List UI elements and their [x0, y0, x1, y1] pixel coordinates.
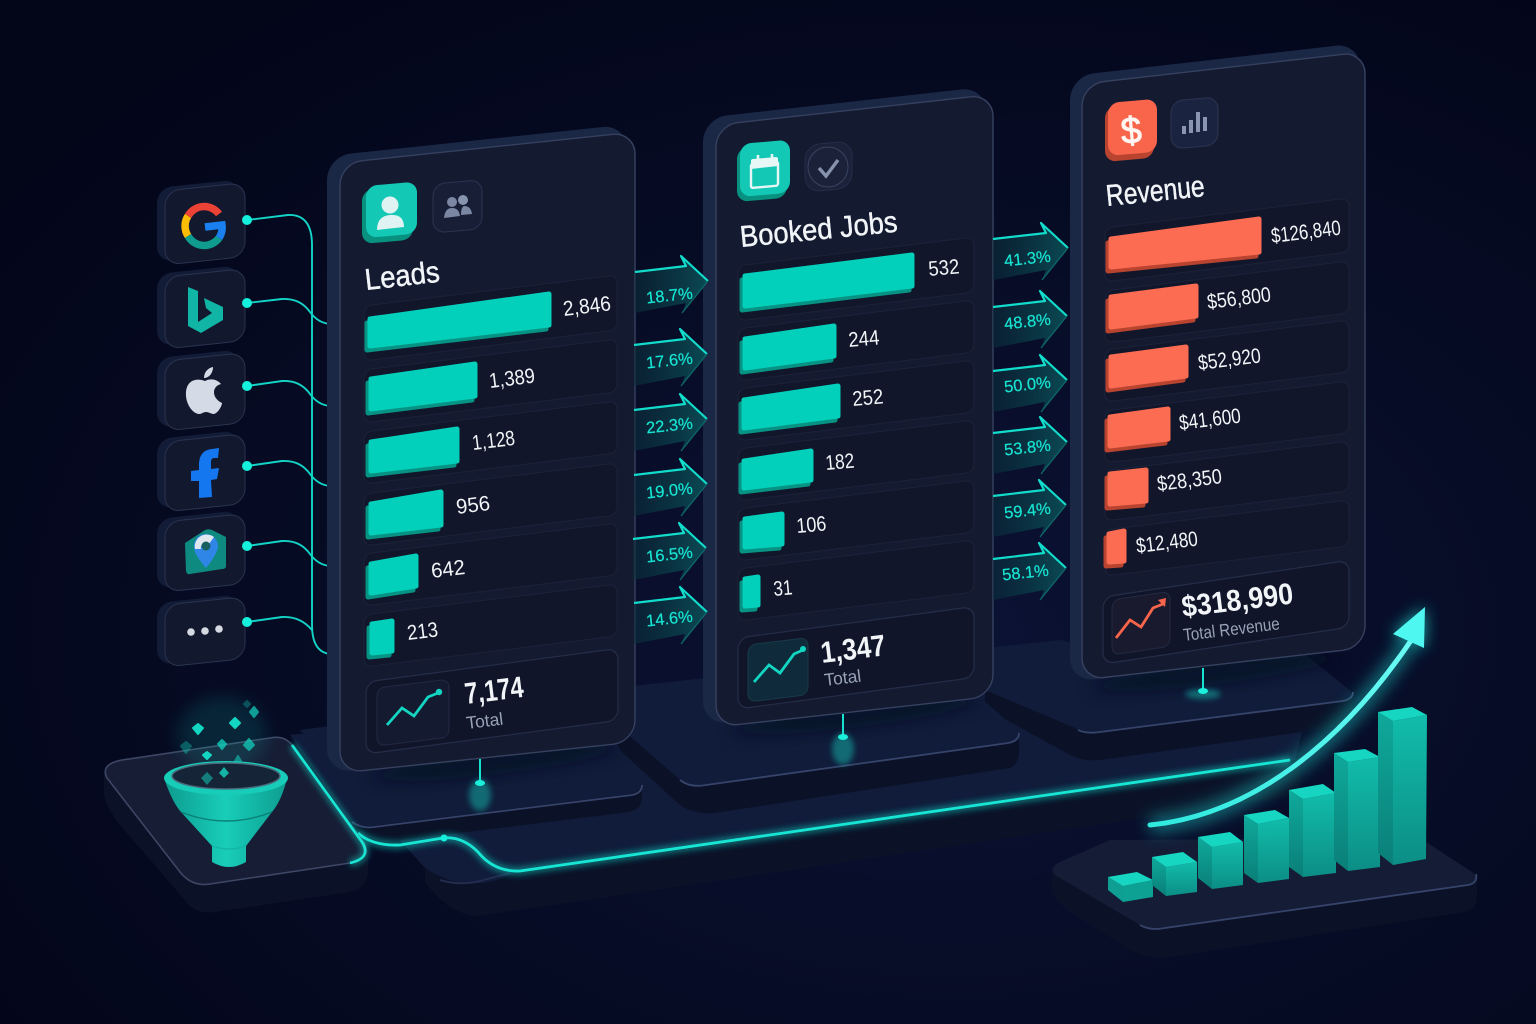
- conversion arrow 48.8%: 48.8%: [1003, 311, 1052, 333]
- panel: leads: [327, 124, 635, 773]
- funnel icon: [164, 697, 288, 867]
- conversion arrow 14.6%: [634, 587, 707, 644]
- source: maps: [157, 510, 252, 592]
- booked jobs rows: [738, 237, 974, 621]
- booked jobs bar 252: 252: [851, 385, 884, 411]
- leads bar 213: [369, 618, 439, 657]
- booked jobs total: 1,347: [819, 629, 887, 670]
- revenue bar $52,920: $52,920: [1197, 344, 1262, 375]
- revenue bar $41,600: [1107, 405, 1242, 450]
- leads bar 2,846: 2,846: [562, 292, 612, 321]
- booked jobs bar 244: [742, 326, 881, 372]
- conversion arrow 17.6%: [634, 329, 707, 386]
- revenue icon: dollar: [1105, 99, 1157, 162]
- revenue total: $318,990: [1180, 578, 1295, 624]
- booked jobs bar 106: 106: [795, 512, 827, 538]
- revenue bar $12,480: [1106, 528, 1199, 566]
- leads bar 1,128: 1,128: [471, 427, 516, 455]
- booked jobs icon: check: [805, 141, 852, 192]
- booked jobs bar 532: [742, 255, 960, 310]
- glowing path: [358, 760, 1290, 871]
- chart platform: [1052, 838, 1477, 958]
- revenue bar $56,800: [1108, 283, 1272, 331]
- revenue icon: bars: [1171, 97, 1218, 149]
- panel: booked jobs: [703, 87, 993, 727]
- panel: revenue: [1070, 43, 1365, 682]
- leads bar 642: [368, 556, 466, 597]
- source connector lines: [247, 215, 330, 654]
- booked jobs total: [738, 607, 974, 709]
- revenue bar $12,480: $12,480: [1135, 528, 1199, 558]
- funnel platform: [104, 737, 368, 912]
- leads icon: person: [362, 182, 417, 244]
- conversion arrow 53.8%: 53.8%: [1003, 437, 1052, 459]
- revenue total: Total Revenue: [1182, 613, 1281, 645]
- revenue platform: [985, 645, 1353, 760]
- leads bar 213: 213: [406, 618, 439, 645]
- conversion arrow 59.4%: 59.4%: [1003, 500, 1052, 522]
- leads heading: Leads: [363, 256, 441, 297]
- conversion arrow 19.0%: [634, 459, 707, 516]
- leads total: [366, 648, 618, 754]
- conversion arrow 22.3%: [634, 394, 707, 451]
- leads bar 1,389: [368, 364, 536, 413]
- conversion arrow 22.3%: 22.3%: [645, 415, 694, 437]
- conversion arrow 58.1%: [993, 543, 1066, 600]
- booked jobs bar 182: [741, 450, 855, 492]
- booked jobs bar 182: 182: [824, 450, 855, 475]
- source: apple: [157, 349, 252, 431]
- conversion arrow 16.5%: 16.5%: [645, 544, 694, 566]
- leads total: 7,174: [463, 671, 526, 711]
- conversion arrow 48.8%: [993, 291, 1067, 348]
- conversion arrow 19.0%: 19.0%: [645, 480, 694, 502]
- source: google: [157, 179, 252, 265]
- booked jobs bar 106: [742, 512, 827, 551]
- source: bing: [157, 265, 252, 349]
- leads bar 1,128: [368, 427, 516, 475]
- stems: [469, 668, 1221, 811]
- conversion arrow 16.5%: [633, 523, 706, 580]
- leads bar 1,389: 1,389: [488, 365, 536, 393]
- booked jobs icon: calendar: [737, 140, 790, 202]
- revenue rows: [1105, 198, 1349, 576]
- long base platform: [300, 640, 1310, 916]
- leads bar 956: 956: [455, 492, 491, 519]
- funnel particles: [181, 701, 258, 766]
- conversion arrow 17.6%: 17.6%: [645, 350, 694, 372]
- revenue bar $41,600: $41,600: [1178, 405, 1242, 435]
- growth bar chart: [1108, 707, 1427, 902]
- booked jobs platform: [614, 680, 1019, 813]
- leads total: Total: [465, 709, 504, 733]
- conversion arrow 53.8%: [993, 417, 1067, 474]
- leads bar 956: [368, 492, 491, 537]
- booked jobs bar 252: [741, 385, 884, 432]
- booked jobs bar 532: 532: [927, 255, 960, 281]
- booked jobs bar 31: [742, 576, 793, 610]
- leads bar 642: 642: [430, 556, 466, 583]
- leads rows: [364, 275, 617, 667]
- conversion arrow 50.0%: 50.0%: [1003, 374, 1052, 396]
- source: facebook: [157, 430, 252, 512]
- conversion arrow 41.3%: 41.3%: [1003, 248, 1052, 270]
- revenue bar $126,840: [1108, 217, 1342, 271]
- source: more: [157, 594, 252, 667]
- revenue icon: dollar: $: [1119, 109, 1143, 152]
- revenue bar $56,800: $56,800: [1206, 283, 1272, 314]
- revenue total: [1103, 560, 1349, 664]
- revenue bar $52,920: [1108, 344, 1262, 390]
- growth arrow: [1150, 607, 1425, 825]
- revenue bar $28,350: [1107, 465, 1223, 508]
- conversion arrow 18.7%: 18.7%: [645, 285, 694, 307]
- leads icon: people: [433, 180, 482, 233]
- booked jobs bar 244: 244: [847, 326, 881, 352]
- booked jobs bar 31: 31: [772, 576, 793, 601]
- booked jobs heading: Booked Jobs: [738, 206, 899, 254]
- booked jobs total: Total: [823, 666, 862, 690]
- revenue bar $126,840: $126,840: [1270, 217, 1342, 248]
- revenue heading: Revenue: [1104, 170, 1206, 213]
- conversion arrow 14.6%: 14.6%: [645, 608, 694, 630]
- revenue bar $28,350: $28,350: [1156, 465, 1223, 496]
- leads bar 2,846: [367, 292, 612, 350]
- conversion arrow 41.3%: [993, 223, 1068, 280]
- conversion arrow 59.4%: [993, 480, 1066, 537]
- leads platform: [290, 700, 642, 842]
- conversion arrow 50.0%: [993, 355, 1067, 412]
- conversion arrow 58.1%: 58.1%: [1001, 562, 1050, 584]
- conversion arrow 18.7%: [635, 256, 708, 313]
